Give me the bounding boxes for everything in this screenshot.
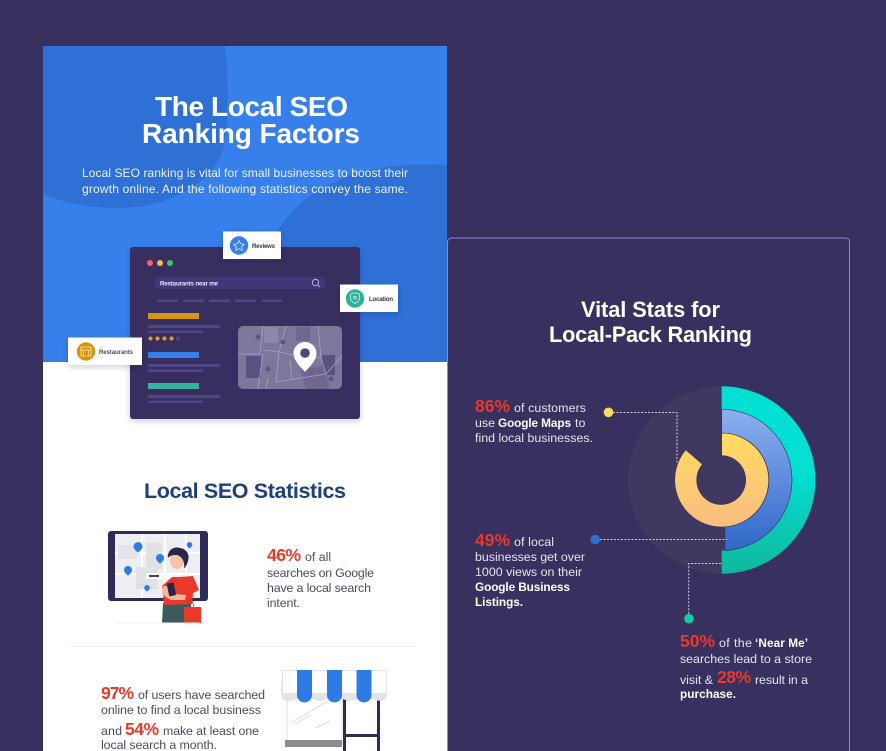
ring: yellow — [675, 433, 769, 527]
stat: 86% — [475, 396, 593, 445]
stat: 50% and 28%: of the — [719, 636, 752, 650]
stat: 49% — [475, 530, 585, 609]
title: The Local SEO — [155, 91, 348, 122]
tag: location: Location — [369, 297, 393, 303]
stat: 97%: 97% — [101, 683, 134, 703]
stat: 49%: Listings. — [475, 595, 523, 609]
title — [142, 91, 360, 149]
stat: 86%: Google Maps — [498, 416, 571, 430]
stat: 97%: of users have searched — [138, 688, 265, 702]
stat: 97%: and — [101, 724, 122, 738]
tag: reviews: Reviews — [252, 244, 276, 250]
stat: 46%: 46% — [267, 545, 301, 565]
stat: 50% and 28%: 28% — [717, 667, 751, 687]
tag: restaurants — [68, 338, 142, 365]
icon: map pin — [294, 342, 316, 372]
stat: 86%: use — [475, 416, 495, 430]
tag: location — [340, 284, 398, 312]
tag: restaurants: Restaurants — [99, 350, 134, 356]
search bar — [155, 277, 325, 289]
stat: 49%: Google Business — [475, 580, 570, 594]
stat: 46%: searches on Google — [267, 566, 374, 580]
browser mockup — [130, 247, 360, 419]
stat: 86%: to — [575, 416, 585, 430]
search bar: Restaurants near me — [160, 280, 219, 288]
stat: 50% and 28%: purchase. — [680, 687, 736, 701]
intro text: Local SEO ranking is vital for small businesses to boost their — [82, 166, 408, 180]
heading: Vital Stats: Local-Pack Ranking — [549, 322, 752, 347]
result list — [148, 313, 220, 403]
illustration: tablet with map and woman — [108, 531, 208, 623]
radial chart — [628, 386, 815, 574]
stat: 50% and 28% — [680, 631, 812, 701]
stat: 50% and 28%: 50% — [680, 631, 715, 651]
stat: 50% and 28%: result in a — [755, 673, 808, 687]
tag: reviews — [223, 232, 281, 259]
stat: 50% and 28%: visit & — [680, 673, 714, 687]
intro text — [82, 166, 408, 196]
panel: blue header — [43, 46, 447, 362]
stat: 97%: online to find a local business — [101, 703, 261, 717]
stat: 46%: intent. — [267, 596, 300, 610]
stat: 50% and 28%: searches lead to a store — [680, 652, 812, 666]
stat: 86%: of customers — [514, 401, 586, 415]
icons: map pins — [124, 542, 192, 592]
panel: left white sheet — [43, 46, 447, 751]
ring: blue — [722, 409, 792, 551]
stat: 46% — [267, 545, 374, 610]
stat: 50% and 28%: ‘Near Me’ — [755, 636, 808, 650]
stat: 97%: make at least one — [163, 724, 259, 738]
connector: blue — [590, 535, 727, 544]
stat: 49%: of local — [514, 535, 554, 549]
connector: yellow — [604, 408, 677, 464]
stat: 49%: businesses get over — [475, 550, 585, 564]
panel: vital stats outline — [448, 238, 850, 751]
stat: 97% — [101, 683, 265, 751]
title: Ranking Factors — [142, 118, 360, 149]
stat: 49%: 49% — [475, 530, 510, 550]
stat: 97%: 54% — [125, 719, 159, 739]
heading: Local SEO Statistics: Local SEO Statistics — [144, 479, 346, 503]
ring: teal — [722, 386, 815, 574]
stat: 46%: of all — [305, 550, 331, 564]
illustration: storefront — [282, 670, 386, 751]
stat: 46%: have a local search — [267, 581, 371, 595]
intro text: growth online. And the following statistics convey the same. — [82, 182, 408, 196]
connector: teal — [684, 564, 721, 624]
heading: Vital Stats: Vital Stats for — [581, 297, 721, 322]
woman — [162, 547, 201, 623]
stat: 49%: 1000 views on their — [475, 565, 582, 579]
heading: Vital Stats — [549, 297, 752, 347]
stat: 86%: find local businesses. — [475, 431, 593, 445]
map thumbnail — [238, 324, 342, 389]
stat: 86%: 86% — [475, 396, 510, 416]
